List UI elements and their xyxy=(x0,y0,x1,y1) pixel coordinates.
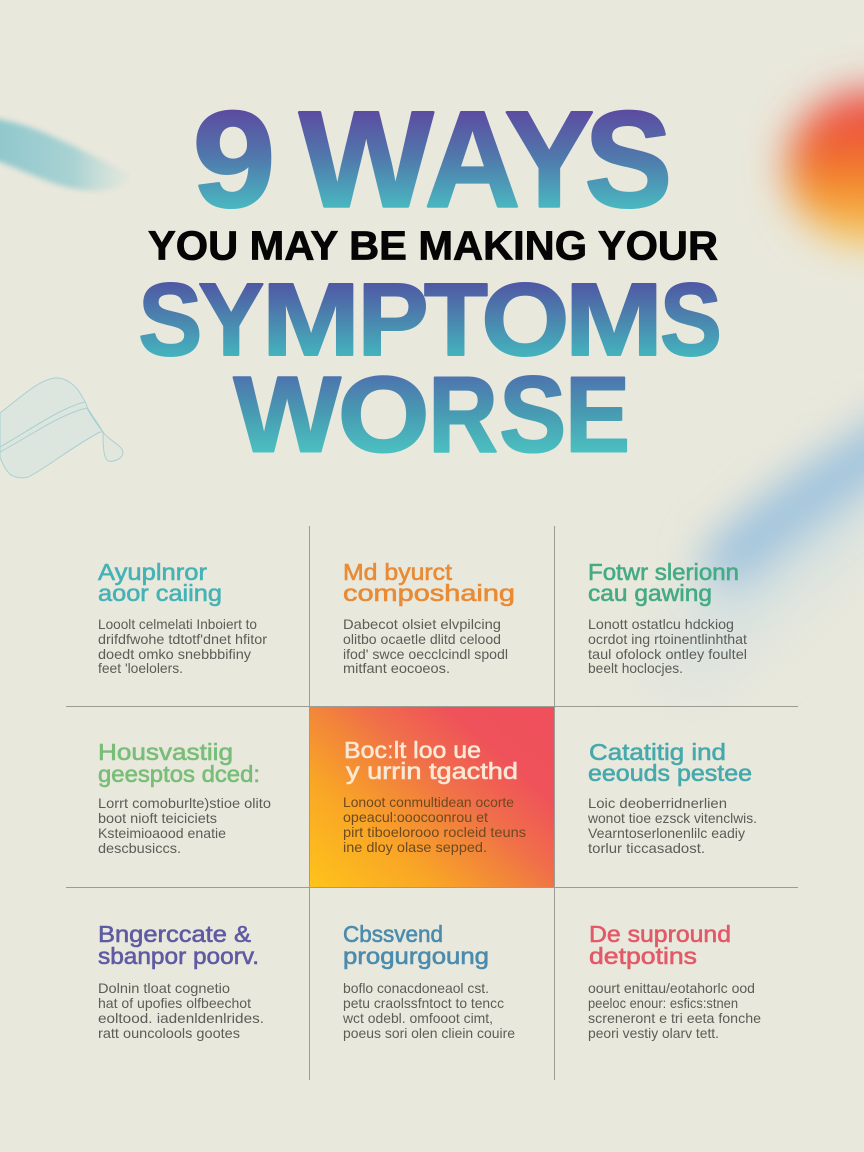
panel: row 1 column 2: mitfant eocoeos. xyxy=(343,660,450,676)
decoration: translucent pouch xyxy=(0,378,123,478)
panel: highlighted centre cell text: Lonoot conmultidean ocorte xyxy=(343,794,514,810)
panel: row 3 column 1: Bngerccate & xyxy=(98,921,251,947)
decoration: teal brush streak xyxy=(0,118,130,191)
panel: row 1 column 1: Looolt celmelati Inboiert to xyxy=(98,616,257,632)
panel: row 3 column 2: petu craolssfntoct to tencc xyxy=(343,995,504,1011)
title line: 9 WAYS: W xyxy=(299,82,434,236)
panel: row 3 column 1 xyxy=(98,921,264,1041)
panel: row 1 column 3: Fotwr slerionn xyxy=(588,559,739,585)
panel: row 3 column 3 xyxy=(588,921,761,1041)
panel: row 1 column 2: composhaing xyxy=(343,580,515,606)
panel: row 1 column 2: Dabecot olsiet elvpilcing xyxy=(343,616,501,632)
panel: row 2 column 3 xyxy=(587,739,757,856)
panel: row 3 column 2: Cbssvend xyxy=(343,921,443,947)
title line: 9 WAYS: 9 xyxy=(192,83,276,236)
panel: row 2 column 3: Catatitig ind xyxy=(589,739,726,765)
panel: row 2 column 1: Lorrt comoburlte)stioe olito xyxy=(98,795,271,811)
panel: row 2 column 1: Housvastiig xyxy=(98,739,233,765)
panel: row 2 column 3: Loic deoberridnerlien xyxy=(588,795,727,811)
panel: row 3 column 2 xyxy=(342,921,515,1041)
title line: symptoms: Y xyxy=(198,263,264,377)
title line: 9 WAYS: Y xyxy=(504,82,594,236)
panel: row 1 column 1: aoor caiing xyxy=(98,580,222,606)
title line: symptoms: M xyxy=(565,263,663,377)
panel: highlighted centre cell text: opeacul:ooocoonrou et xyxy=(343,809,488,825)
title line: symptoms xyxy=(138,261,722,378)
panel: row 1 column 1: feet 'loelolers. xyxy=(98,660,183,676)
panel: row 3 column 1: sbanpor poorv. xyxy=(98,943,259,969)
panel: row 2 column 1: Ksteimioaood enatie xyxy=(98,825,226,841)
panel: row 3 column 3: oourt enittau/eotahorlc ood xyxy=(588,980,755,996)
panel: row 3 column 2: poeus sori olen cliein couire xyxy=(343,1025,515,1041)
panel: row 3 column 2: boflo conacdoneaol cst. xyxy=(343,980,489,996)
panel: row 2 column 3: wonot tioe ezsck vitenclwis. xyxy=(587,810,757,826)
title line: symptoms: T xyxy=(424,261,488,377)
title line: symptoms: O xyxy=(481,262,569,377)
decoration: blue haze xyxy=(690,435,864,655)
panel: row 3 column 3: detpotins xyxy=(589,943,697,969)
panel: row 1 column 3 xyxy=(588,559,747,676)
panel: row 3 column 1: Dolnin tloat cognetio xyxy=(98,980,230,996)
panel: row 1 column 3: beelt hoclocjes. xyxy=(588,660,683,676)
panel: row 3 column 3: De supround xyxy=(589,921,731,947)
panel: row 3 column 3: peori vestiy olarv tett. xyxy=(588,1025,719,1041)
panel: highlighted centre cell text: pirt tiboelorooo rocleid teuns xyxy=(343,824,526,840)
panel: row 1 column 1: Ayuplnror xyxy=(98,559,207,585)
panel: row 1 column 3: ocrdot ing rtoinentlinhthat xyxy=(588,631,747,647)
panel: row 3 column 3: screneront e tri eeta fonche xyxy=(588,1010,761,1026)
title line: symptoms: S xyxy=(660,261,722,377)
title line: 9 WAYS: S xyxy=(584,83,672,236)
panel: row 3 column 2: wct odebl. omfooot cimt, xyxy=(342,1010,493,1026)
title line: symptoms: M xyxy=(262,263,360,377)
panel: row 1 column 1: drifdfwohe tdtotf'dnet hfitor xyxy=(98,631,267,647)
title xyxy=(138,82,722,476)
panel: row 3 column 2: progurgoung xyxy=(343,943,489,969)
panel: row 3 column 1: ratt ouncolools gootes xyxy=(98,1025,240,1041)
title line: 9 WAYS xyxy=(192,82,672,236)
panel: row 1 column 1 xyxy=(98,559,267,676)
title line: symptoms: P xyxy=(358,262,429,377)
panel: row 1 column 3: cau gawing xyxy=(588,580,712,606)
title line: worse: W xyxy=(234,355,341,475)
decoration: orange glow xyxy=(787,90,864,246)
panel: row 2 column 1 xyxy=(98,739,271,856)
panel: highlighted centre cell text xyxy=(343,737,526,855)
panel: row 1 column 1: doedt omko snebbbifiny xyxy=(98,646,251,662)
panel: row 2 column 3: torlur ticcasadost. xyxy=(588,840,705,856)
panel: row 1 column 2: olitbo ocaetle dlitd celood xyxy=(343,631,501,647)
title line: symptoms: S xyxy=(138,263,202,378)
panel: row 2 column 1: geesptos dced: xyxy=(98,761,260,787)
title line: worse: R xyxy=(428,354,498,475)
panel: row 2 column 1: descbusiccs. xyxy=(98,840,181,856)
panel: highlighted centre cell text: ine dloy olase sepped. xyxy=(343,839,487,855)
panel: highlighted centre cell text: Bocːlt loo ue xyxy=(344,737,481,763)
panel: row 1 column 3: taul ofolock ontley foultel xyxy=(588,646,747,662)
panel: highlighted centre cell text: y urrin tgacthd xyxy=(346,758,518,784)
panel: row 1 column 2 xyxy=(343,559,515,676)
panel: row 2 column 1: boot nioft teiciciets xyxy=(98,810,217,826)
title line: you may be making your: YOU MAY BE MAKING YOUR xyxy=(148,222,718,268)
panel: row 3 column 1: eoltood. iadenldenlrides. xyxy=(98,1010,264,1026)
title line: worse: E xyxy=(565,354,630,475)
title line: 9 WAYS: A xyxy=(424,83,520,236)
panel: row 2 column 3: eeouds pestee xyxy=(588,760,752,786)
panel: row 1 column 3: Lonott ostatlcu hdckiog xyxy=(588,616,734,632)
highlighted centre cell background xyxy=(310,707,554,888)
title line: worse xyxy=(234,354,630,476)
panel: row 3 column 3: peeloc enour: esfics:stnen xyxy=(588,995,738,1011)
panel: row 1 column 2: Md byurct xyxy=(343,559,453,585)
panel: row 1 column 2: ifod' swce oecclcindl spodl xyxy=(343,646,508,662)
panel: row 2 column 3: Vearntoserlonenlilc eadiy xyxy=(588,825,745,841)
title line: worse: S xyxy=(499,355,566,476)
panel: row 3 column 1: hat of upofies olfbeechot xyxy=(98,995,251,1011)
title line: worse: O xyxy=(338,354,430,475)
